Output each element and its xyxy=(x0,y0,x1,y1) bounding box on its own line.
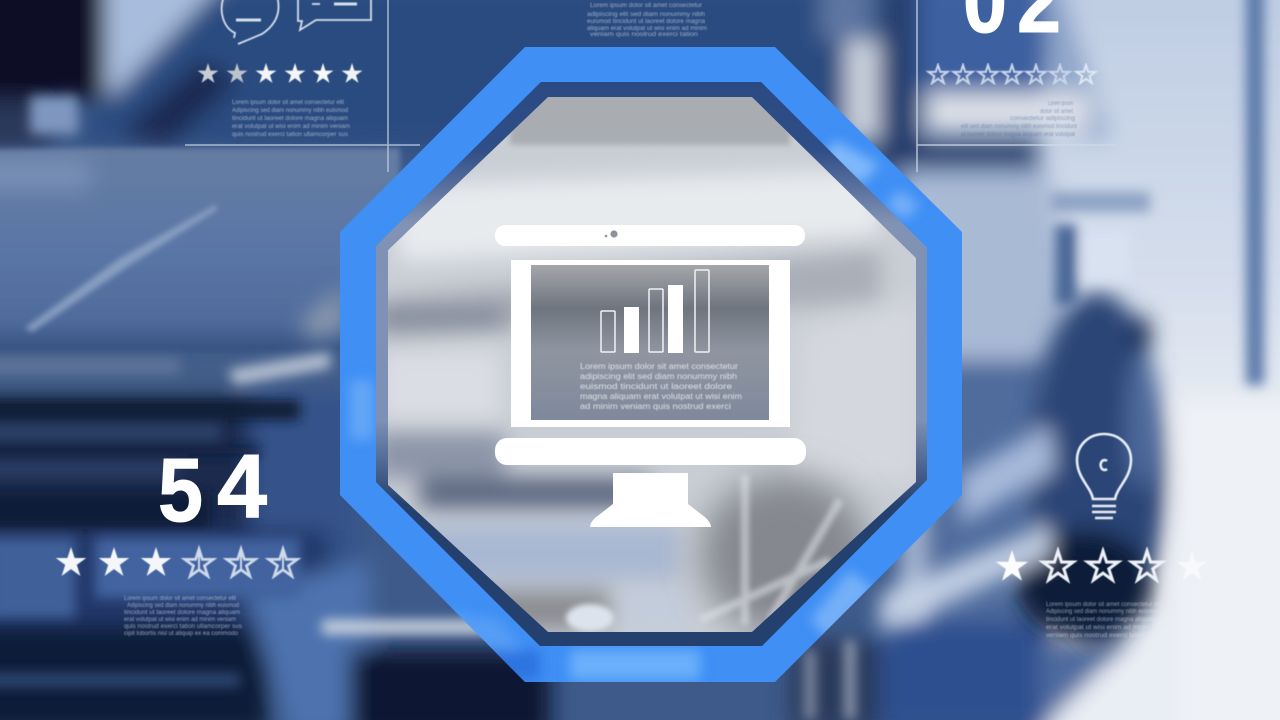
icon: chat bubbles xyxy=(222,0,371,44)
screen caption text xyxy=(580,362,742,411)
panel: bottom-right idea rating xyxy=(996,434,1207,639)
description text: quis nostrud exerci tation ullamcorper sus xyxy=(124,623,243,630)
frame lines xyxy=(917,0,1115,172)
description text xyxy=(124,595,243,637)
hood panel with crisp upper edge xyxy=(0,148,400,352)
star rating: one of five xyxy=(996,550,1207,581)
screen caption text: Lorem ipsum dolor sit amet consectetur xyxy=(580,362,738,371)
text block: top centre: euismod tincidunt ut laoreet dolore magna xyxy=(587,18,705,25)
panel: octagon glass interior xyxy=(375,85,925,640)
panel: top-right metric 02 xyxy=(917,0,1115,172)
screen caption text: magna aliquam erat volutpat ut wisi enim xyxy=(580,392,742,401)
number 54: 5 xyxy=(158,440,203,541)
description text: tincidunt ut laoreet dolore magna aliquam xyxy=(1046,616,1156,623)
panel: octagon blue ring xyxy=(340,47,962,682)
description text: ut laoreet dolore magna aliquam erat volutpat xyxy=(961,131,1075,138)
description text: veniam quis nostrud exerci tation xyxy=(1046,632,1146,639)
text block: top centre: veniam quis nostrud exerci tation xyxy=(590,31,698,38)
monitor lower bar xyxy=(495,438,806,465)
panel: top-left reviews xyxy=(185,0,420,172)
monitor stand xyxy=(590,473,711,527)
description text xyxy=(961,100,1077,138)
frame lines xyxy=(185,0,420,172)
description text: tincidunt ut laoreet dolore magna aliquam xyxy=(232,115,348,122)
star rating: outline stars xyxy=(928,65,1096,83)
bar chart on screen xyxy=(601,270,709,353)
monitor screen xyxy=(511,260,790,427)
description text: consectetur adipiscing xyxy=(1010,115,1075,122)
text block: top centre: Lorem ipsum dolor sit amet consectetur xyxy=(590,2,703,9)
description text: Adipiscing sed diam nonummy nibh euismod xyxy=(127,602,239,609)
screen caption text: euismod tincidunt ut laoreet dolore xyxy=(580,382,733,391)
description text: Lorem ipsum dolor sit amet consectetur elit xyxy=(1046,601,1162,608)
description text: erat volutpat ut wisi enim ad minim xyxy=(1046,624,1151,631)
description text: Adipiscing sed diam nonummy nibh euismod xyxy=(1046,608,1160,615)
description text xyxy=(232,99,350,138)
screen caption text: ad minim veniam quis nostrud exerci xyxy=(580,402,731,411)
description text: Lorem ipsum dolor sit amet consectetur elit xyxy=(124,595,236,602)
description text: Lorem ipsum xyxy=(1048,100,1073,107)
description text: Lorem ipsum dolor sit amet consectetur elit xyxy=(232,99,344,106)
description text: tincidunt ut laoreet dolore magna aliquam xyxy=(124,609,240,616)
text block: top centre: adipiscing elit sed diam nonummy nibh xyxy=(587,11,705,18)
description text xyxy=(1046,601,1162,639)
number 54 xyxy=(158,437,267,541)
panel: bottom-left metric 54 xyxy=(56,437,297,637)
description text: elit sed diam nonummy nibh euismod tincidunt xyxy=(961,123,1077,130)
description text: dolor sit amet xyxy=(1040,108,1073,115)
screen caption text: adipiscing elit sed diam nonummy nibh xyxy=(580,372,737,381)
text block: top centre xyxy=(587,2,707,38)
description text: erat volutpat ut wisi enim ad minim veniam xyxy=(124,616,236,623)
star rating: six stars xyxy=(198,63,362,83)
description text: erat volutpat ut wisi enim ad minim veniam xyxy=(232,123,350,130)
number 54: 4 xyxy=(217,437,267,537)
icon: light bulb xyxy=(1077,434,1131,518)
star rating: three of six xyxy=(56,547,297,576)
icon: presentation monitor xyxy=(495,225,806,527)
description text: Adipiscing sed diam nonummy nibh euismod xyxy=(232,107,348,114)
number 02 xyxy=(963,0,1061,51)
description text: quis nostrud exerci tation ullamcorper sus xyxy=(232,131,349,138)
monitor top bar with camera xyxy=(495,225,805,246)
description text: cipit lobortis nisl ut aliquip ex ea commodo xyxy=(124,630,238,637)
text block: top centre: aliquam erat volutpat ut wisi enim ad minim xyxy=(587,25,707,32)
